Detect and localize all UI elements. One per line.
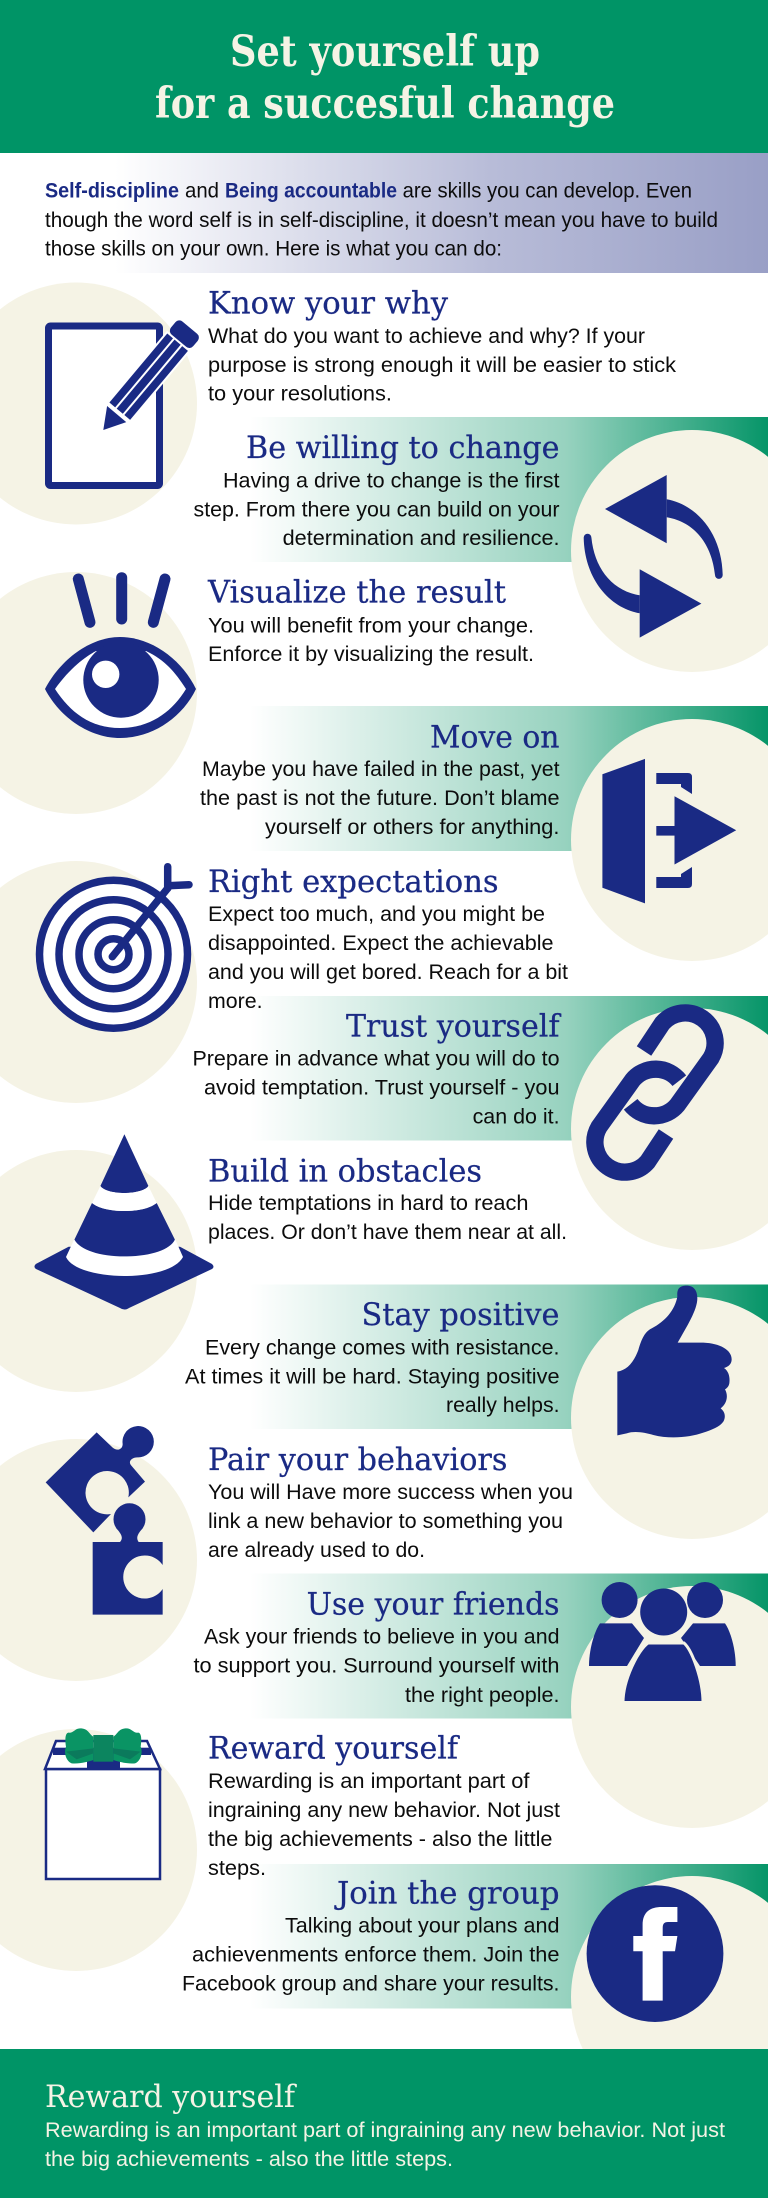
item: stay positive: really helps. [446,1394,560,1417]
item: right expectations: more. [208,990,262,1013]
item: reward yourself: the big achievements - also the little [208,1828,552,1851]
gradient bands behind right-aligned items [250,417,768,2008]
icon: traffic cone [34,1134,214,1310]
item: visualize the result [207,575,534,666]
item: trust yourself: can do it. [473,1106,560,1128]
item: know your why: to your resolutions. [208,383,392,406]
item: stay positive [185,1297,560,1417]
icon: facebook [587,1885,723,2022]
item: right expectations: Right expectations [208,864,499,900]
item: use your friends: to support you. Surround yourself with [194,1654,560,1678]
item: build in obstacles: Build in obstacles [208,1153,482,1189]
icon: gift box [45,1728,160,1879]
item: be willing to change: Having a drive to change is the first [223,470,560,492]
icon: target with arrow [40,867,189,1028]
item: join the group: achievenments enforce them. Join the [192,1944,560,1966]
item: stay positive: Every change comes with resistance. [205,1336,560,1360]
item: join the group [182,1876,560,1996]
item: visualize the result: Enforce it by visualizing the result. [208,643,534,666]
intro panel: and [185,180,219,202]
item: be willing to change [194,430,560,550]
item: know your why: purpose is strong enough it will be easier to stick [208,354,677,377]
title: for a succesful change [155,79,615,129]
item: move on: Maybe you have failed in the past, yet [202,758,560,781]
item: use your friends [194,1586,560,1707]
item: be willing to change: determination and resilience. [283,527,560,550]
item: know your why [208,286,677,406]
item: right expectations: Expect too much, and you might be [208,903,545,926]
icon: exit door [602,759,736,903]
item: pair your behaviors: link a new behavior to something you [208,1510,563,1533]
item: stay positive: At times it will be hard. Staying positive [185,1366,560,1388]
intro panel: Being accountable [225,180,397,202]
item: trust yourself: Prepare in advance what you will do to [192,1048,560,1070]
header banner [0,0,768,153]
item: be willing to change: Be willing to change [246,430,560,466]
item: be willing to change: step. From there you can build on your [194,498,560,522]
footer panel: Reward yourself [45,2079,297,2115]
item: know your why: What do you want to achieve and why? If your [208,325,645,348]
footer panel: Rewarding is an important part of ingraining any new behavior. Not just [45,2119,725,2142]
icon: change arrows [584,475,723,638]
item: trust yourself [192,1009,562,1128]
item: build in obstacles: Hide temptations in hard to reach [208,1192,528,1215]
icon: puzzle pieces [46,1426,163,1615]
icon: group of people [589,1582,736,1702]
item: pair your behaviors [208,1442,573,1562]
intro panel: those skills on your own. Here is what you can do: [45,238,502,260]
item: reward yourself [208,1730,560,1880]
item: move on: the past is not the future. Don’t blame [200,787,560,810]
item: visualize the result: Visualize the result [207,575,507,611]
item: reward yourself: Reward yourself [208,1730,460,1766]
item: reward yourself: steps. [208,1857,266,1880]
item: build in obstacles [208,1153,567,1244]
intro panel [0,153,768,273]
item: join the group: Talking about your plans and [285,1914,560,1938]
item: pair your behaviors: Pair your behaviors [208,1442,507,1478]
title [155,27,615,129]
item: stay positive: Stay positive [362,1297,560,1333]
item: pair your behaviors: You will Have more success when you [208,1481,573,1504]
intro panel: are skills you can develop. Even [403,180,692,202]
item: join the group: Facebook group and share your results. [182,1972,560,1996]
item: know your why: Know your why [208,286,448,322]
icon: eye [45,578,196,738]
icon: thumbs up [617,1286,732,1437]
item: visualize the result: You will benefit from your change. [208,614,534,638]
intro panel: though the word self is in self-discipline, it doesn’t mean you have to build [45,209,718,232]
icon: chain link [595,1013,715,1172]
item: reward yourself: Rewarding is an important part of [208,1770,530,1793]
item: right expectations: and you will get bored. Reach for a bit [208,961,568,984]
footer panel [0,2049,768,2198]
title: Set yourself up [230,27,540,77]
item: build in obstacles: places. Or don’t have them near at all. [208,1221,567,1244]
item: use your friends: Ask your friends to believe in you and [204,1626,560,1648]
item: move on [200,719,560,839]
item: use your friends: the right people. [405,1684,560,1707]
item: reward yourself: ingraining any new behavior. Not just [208,1799,560,1822]
footer panel: the big achievements - also the little steps. [45,2148,453,2171]
intro panel: Self-discipline [45,180,179,202]
item: trust yourself: avoid temptation. Trust yourself - you [204,1076,560,1100]
item: trust yourself: Trust yourself [346,1009,562,1045]
item: use your friends: Use your friends [307,1586,560,1622]
item: pair your behaviors: are already used to do. [208,1539,425,1562]
item: join the group: Join the group [334,1876,560,1912]
item: move on: Move on [430,719,560,755]
item: right expectations [208,864,568,1013]
item: move on: yourself or others for anything. [265,816,560,839]
item: right expectations: disappointed. Expect the achievable [208,932,554,955]
icon: notepad and pencil [48,318,202,486]
